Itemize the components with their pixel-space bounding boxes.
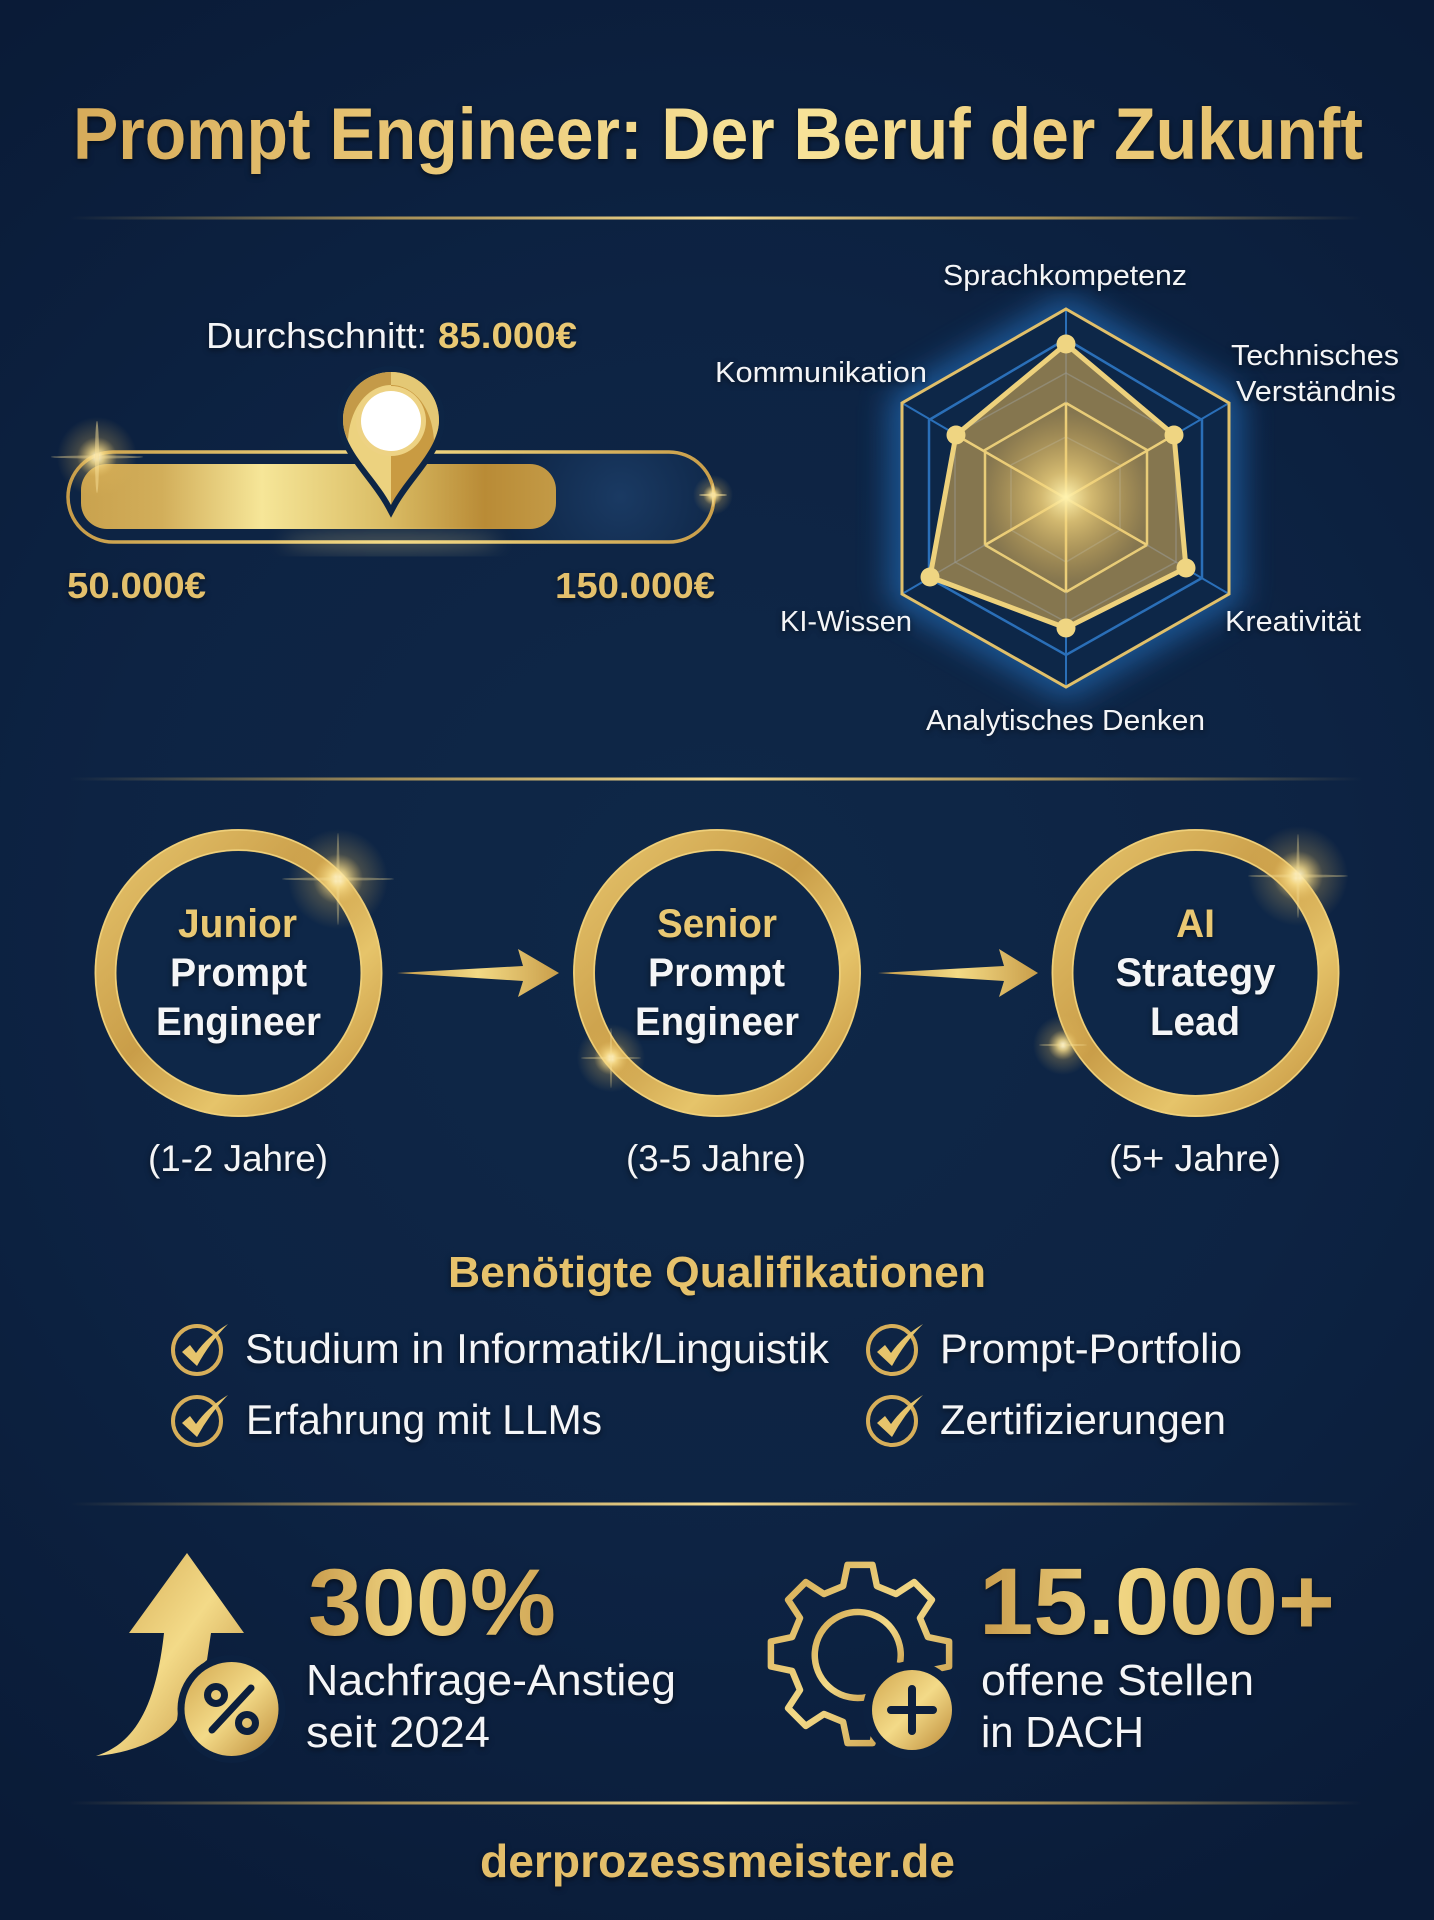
radar labels: Technisches bbox=[1231, 340, 1399, 372]
qualification: portfolio: Prompt-Portfolio bbox=[940, 1325, 1242, 1372]
step: ai strategy lead: AI bbox=[1176, 902, 1215, 946]
stat: open positions bbox=[771, 1549, 1335, 1759]
average salary label: Durchschnitt: bbox=[206, 315, 427, 356]
value: 15.000+: 15.000+ bbox=[979, 1549, 1335, 1655]
step: senior: (3-5 Jahre) bbox=[626, 1138, 806, 1179]
radar center glow bbox=[981, 412, 1151, 582]
step: ai strategy lead: Lead bbox=[1150, 1000, 1240, 1044]
icon: percent badge bbox=[178, 1655, 286, 1763]
salary bar fill bbox=[81, 464, 556, 529]
minimum salary label: 50.000€ bbox=[67, 565, 206, 606]
radar chart: skills bbox=[715, 260, 1399, 737]
step: senior: Prompt bbox=[648, 951, 785, 995]
radar labels: Kommunikation bbox=[715, 357, 927, 389]
career path bbox=[96, 826, 1348, 1179]
panel: salary range bbox=[51, 315, 733, 606]
sparkles on bar bbox=[51, 417, 733, 551]
icon: rising arrow bbox=[96, 1553, 244, 1756]
average salary label: 85.000€ bbox=[438, 315, 577, 356]
description: demand bbox=[306, 1656, 676, 1757]
qualification: erfahrung: Erfahrung mit LLMs bbox=[246, 1396, 602, 1443]
step: senior: Engineer bbox=[635, 1000, 799, 1044]
step: senior: Senior bbox=[657, 902, 777, 946]
description: demand: seit 2024 bbox=[306, 1708, 490, 1757]
radar grid bbox=[902, 309, 1229, 687]
step: ai strategy lead: (5+ Jahre) bbox=[1109, 1138, 1281, 1179]
step: junior: Junior bbox=[178, 902, 297, 946]
heading: qualifications: Benötigte Qualifikationen bbox=[448, 1248, 986, 1297]
maximum salary label: 150.000€ bbox=[555, 565, 715, 606]
radar labels bbox=[715, 260, 1399, 737]
qualification: studium: Studium in Informatik/Linguistik bbox=[245, 1325, 830, 1372]
value: 300%: 300% bbox=[308, 1550, 556, 1656]
arrow: junior to senior bbox=[397, 949, 559, 997]
icon: location pin bbox=[343, 372, 439, 505]
qualifications list bbox=[173, 1324, 1242, 1445]
icon: gear bbox=[771, 1565, 949, 1743]
radar labels: Kreativität bbox=[1225, 606, 1361, 638]
icon: plus badge bbox=[863, 1661, 961, 1759]
radar data polygon bbox=[930, 344, 1186, 628]
step: junior: Prompt bbox=[170, 951, 307, 995]
title: Prompt Engineer: Der Beruf der Zukunft bbox=[73, 94, 1363, 175]
radar data points bbox=[920, 334, 1196, 638]
radar inner grid bbox=[930, 344, 1186, 628]
arrow: senior to lead bbox=[878, 949, 1038, 997]
description: demand: Nachfrage-Anstieg bbox=[306, 1656, 676, 1705]
step: junior: Engineer bbox=[156, 1000, 321, 1044]
step: junior: (1-2 Jahre) bbox=[148, 1138, 328, 1179]
radar data outline bbox=[930, 344, 1186, 628]
average salary label bbox=[206, 315, 577, 356]
step: ai strategy lead: Strategy bbox=[1116, 951, 1276, 995]
step: senior bbox=[574, 830, 860, 1179]
qualification: zertifizierungen: Zertifizierungen bbox=[940, 1396, 1226, 1443]
stat: demand growth bbox=[96, 1550, 676, 1763]
radar labels: Verständnis bbox=[1236, 376, 1396, 408]
step: ai strategy lead bbox=[1033, 826, 1348, 1179]
footer: website: derprozessmeister.de bbox=[480, 1835, 955, 1887]
radar labels: Analytisches Denken bbox=[926, 705, 1205, 737]
description: positions bbox=[981, 1656, 1254, 1757]
salary bar track bbox=[68, 452, 714, 542]
radar labels: Sprachkompetenz bbox=[943, 260, 1187, 292]
step: junior bbox=[96, 829, 394, 1179]
radar outer frame bbox=[902, 309, 1229, 687]
description: positions: in DACH bbox=[981, 1708, 1144, 1757]
description: positions: offene Stellen bbox=[981, 1656, 1254, 1705]
radar labels: KI-Wissen bbox=[780, 606, 912, 638]
